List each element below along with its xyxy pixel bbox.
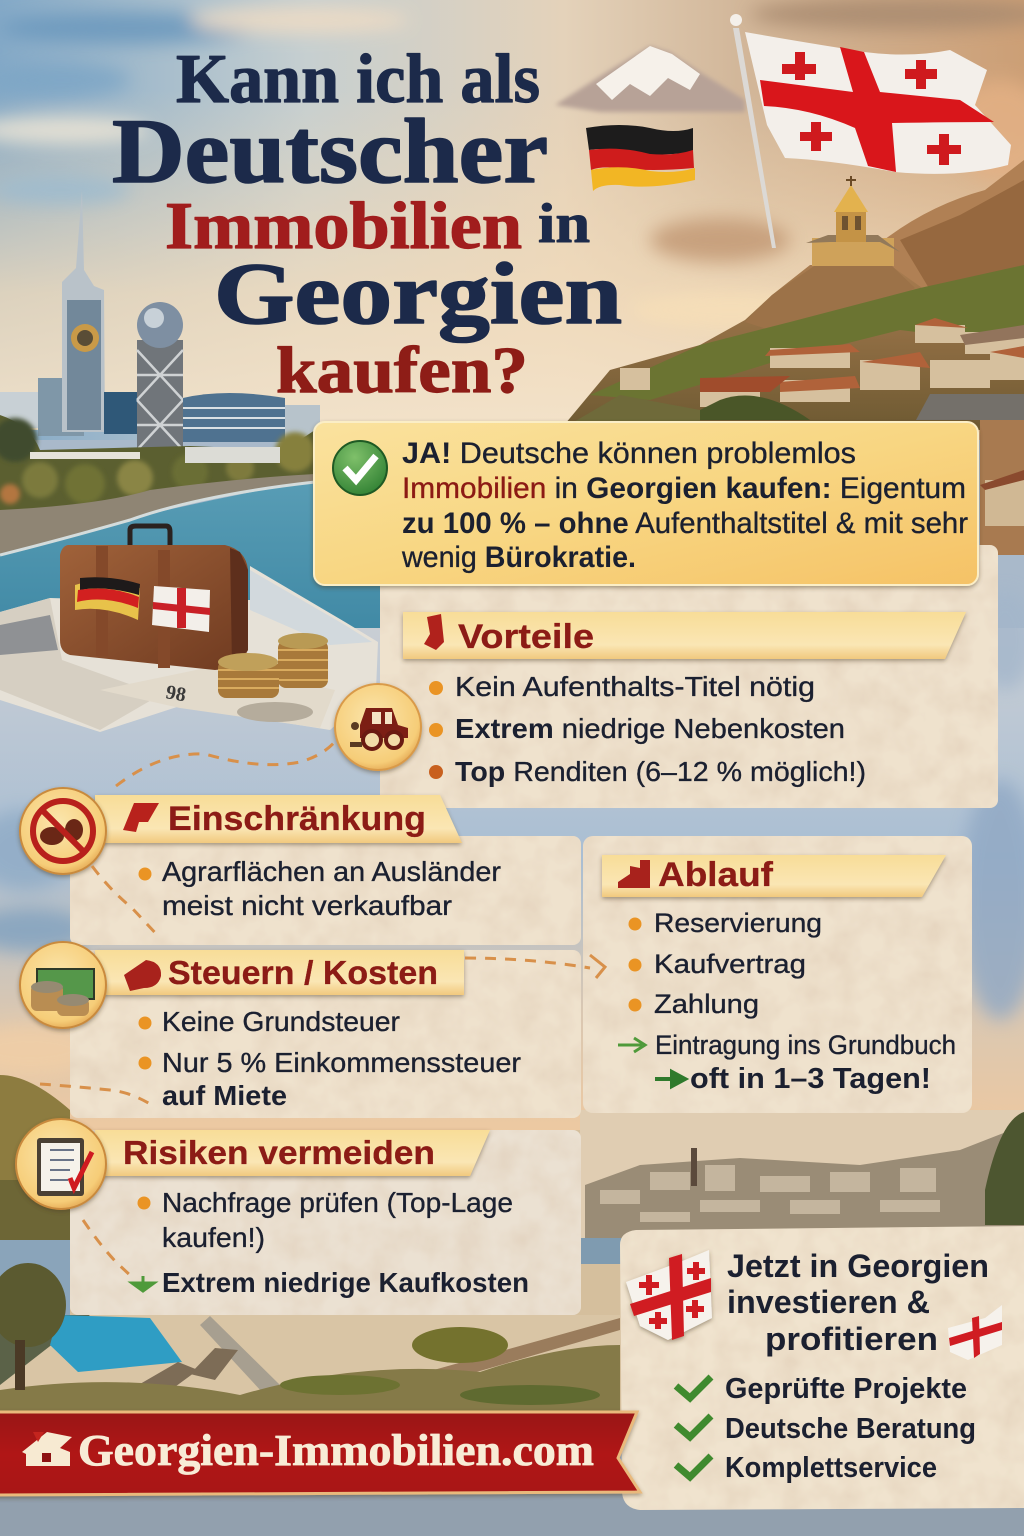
title: Deutscher <box>112 100 548 202</box>
illustration: banknotes: 98 <box>164 681 188 706</box>
list: Einschränkung: meist nicht verkaufbar <box>162 890 452 921</box>
panel: Steuern / Kosten <box>20 942 581 1118</box>
illustration: banknotes <box>0 566 378 732</box>
list: Ablauf: Kaufvertrag <box>654 949 806 979</box>
callout: JA answer: wenig Bürokratie. <box>401 541 636 574</box>
callout: JA answer: JA! Deutsche können problemlos <box>402 437 856 470</box>
palms and greenery <box>0 415 315 512</box>
list: Vorteile: Top Renditen (6–12 % möglich!) <box>455 756 866 787</box>
sea <box>0 470 380 640</box>
flag pole <box>730 14 776 248</box>
ribbon: Einschränkung heading <box>95 795 462 843</box>
icon: checklist clipboard <box>16 1119 106 1209</box>
list: Risiken: Nachfrage prüfen (Top-Lage <box>162 1187 513 1218</box>
icon: green check <box>333 441 387 495</box>
ribbon: Ablauf heading <box>602 855 946 897</box>
church <box>812 238 894 266</box>
terrace and pool <box>0 1315 620 1412</box>
houses <box>620 325 1024 407</box>
list: Vorteile <box>429 671 866 787</box>
icon: house <box>22 1432 72 1466</box>
icon: coins <box>218 633 328 698</box>
icon: suitcase <box>60 526 248 670</box>
checklist: Geprüfte Projekte <box>725 1373 967 1405</box>
panel: call to action <box>620 1226 1024 1510</box>
ribbon: Vorteile heading <box>403 612 966 659</box>
banner: website <box>0 1412 640 1495</box>
title: Kann ich als <box>176 41 540 118</box>
far town <box>585 1125 1024 1240</box>
list: Risiken: kaufen!) <box>162 1222 265 1253</box>
checklist: Deutsche Beratung <box>725 1413 976 1445</box>
list: Ablauf: Reservierung <box>654 908 822 938</box>
mid background clouds <box>0 628 1024 1138</box>
callout: JA answer: zu 100 % – ohne Aufenthaltstitel & mit sehr <box>402 507 968 540</box>
bottom strip <box>0 1492 1024 1536</box>
beach <box>0 474 315 555</box>
icon: small flag <box>948 1305 1002 1360</box>
list: Ablauf: Eintragung ins Grundbuch <box>655 1030 956 1060</box>
list: Ablauf: oft in 1–3 Tagen! <box>690 1063 931 1095</box>
arrow <box>655 1072 685 1086</box>
title <box>112 41 622 407</box>
list: Steuern <box>138 1006 521 1111</box>
list: Einschränkung: Agrarflächen an Ausländer <box>162 856 501 887</box>
ribbon: Steuern heading: Steuern / Kosten <box>168 954 438 991</box>
mountain <box>555 46 745 112</box>
ribbon: Einschränkung heading: Einschränkung <box>168 800 426 838</box>
panel: Vorteile <box>380 545 998 808</box>
panel: Ablauf <box>583 836 972 1113</box>
list: Risiken: Extrem niedrige Kaufkosten <box>162 1267 529 1298</box>
icon: forbidden sign <box>20 788 106 874</box>
panel: Risiken vermeiden <box>16 1119 581 1315</box>
list: Ablauf: Zahlung <box>654 989 759 1019</box>
panel: call to action: investieren & <box>727 1284 930 1320</box>
title: Georgien <box>214 246 622 343</box>
list: Risiken <box>132 1187 529 1298</box>
checklist <box>676 1373 976 1484</box>
list: Einschränkung <box>138 856 501 921</box>
ribbon: Risiken heading <box>95 1130 490 1176</box>
icon: tractor medal <box>335 684 421 770</box>
dashed arrow to Ablauf <box>465 955 605 978</box>
Georgian flag <box>745 32 1011 174</box>
title: kaufen? <box>276 334 528 407</box>
arrow <box>618 1038 645 1052</box>
ribbon: Risiken heading: Risiken vermeiden <box>123 1134 435 1171</box>
panel: call to action: profitieren <box>765 1321 938 1357</box>
title: Immobilien <box>165 189 522 263</box>
list: Vorteile: Extrem niedrige Nebenkosten <box>455 713 845 744</box>
ribbon: Vorteile heading: Vorteile <box>458 618 594 656</box>
list: Steuern: Nur 5 % Einkommenssteuer <box>162 1047 521 1078</box>
hillside with church and houses <box>560 160 1024 555</box>
lower sea and sky <box>0 1130 1024 1420</box>
panel: Einschränkung <box>20 788 581 945</box>
icon: waving flag <box>626 1250 712 1340</box>
list: Vorteile: Kein Aufenthalts-Titel nötig <box>455 671 815 702</box>
banner: website: Georgien-Immobilien.com <box>78 1426 594 1475</box>
ribbon: Ablauf heading: Ablauf <box>658 856 774 894</box>
city skyline <box>0 392 38 428</box>
checklist: Komplettservice <box>725 1452 937 1484</box>
German flag <box>586 125 695 191</box>
list: Steuern: Keine Grundsteuer <box>162 1006 400 1037</box>
dashed connector <box>116 738 338 786</box>
title: in <box>538 193 590 255</box>
callout: JA answer: Immobilien in Georgien kaufen: Eigentum <box>402 472 966 505</box>
list: Ablauf <box>618 908 956 1095</box>
list: Steuern: auf Miete <box>162 1080 287 1111</box>
callout: JA answer <box>314 422 978 585</box>
panel: call to action: Jetzt in Georgien <box>727 1248 989 1284</box>
ribbon: Steuern heading <box>95 950 464 995</box>
icon: money and coins <box>20 942 106 1028</box>
